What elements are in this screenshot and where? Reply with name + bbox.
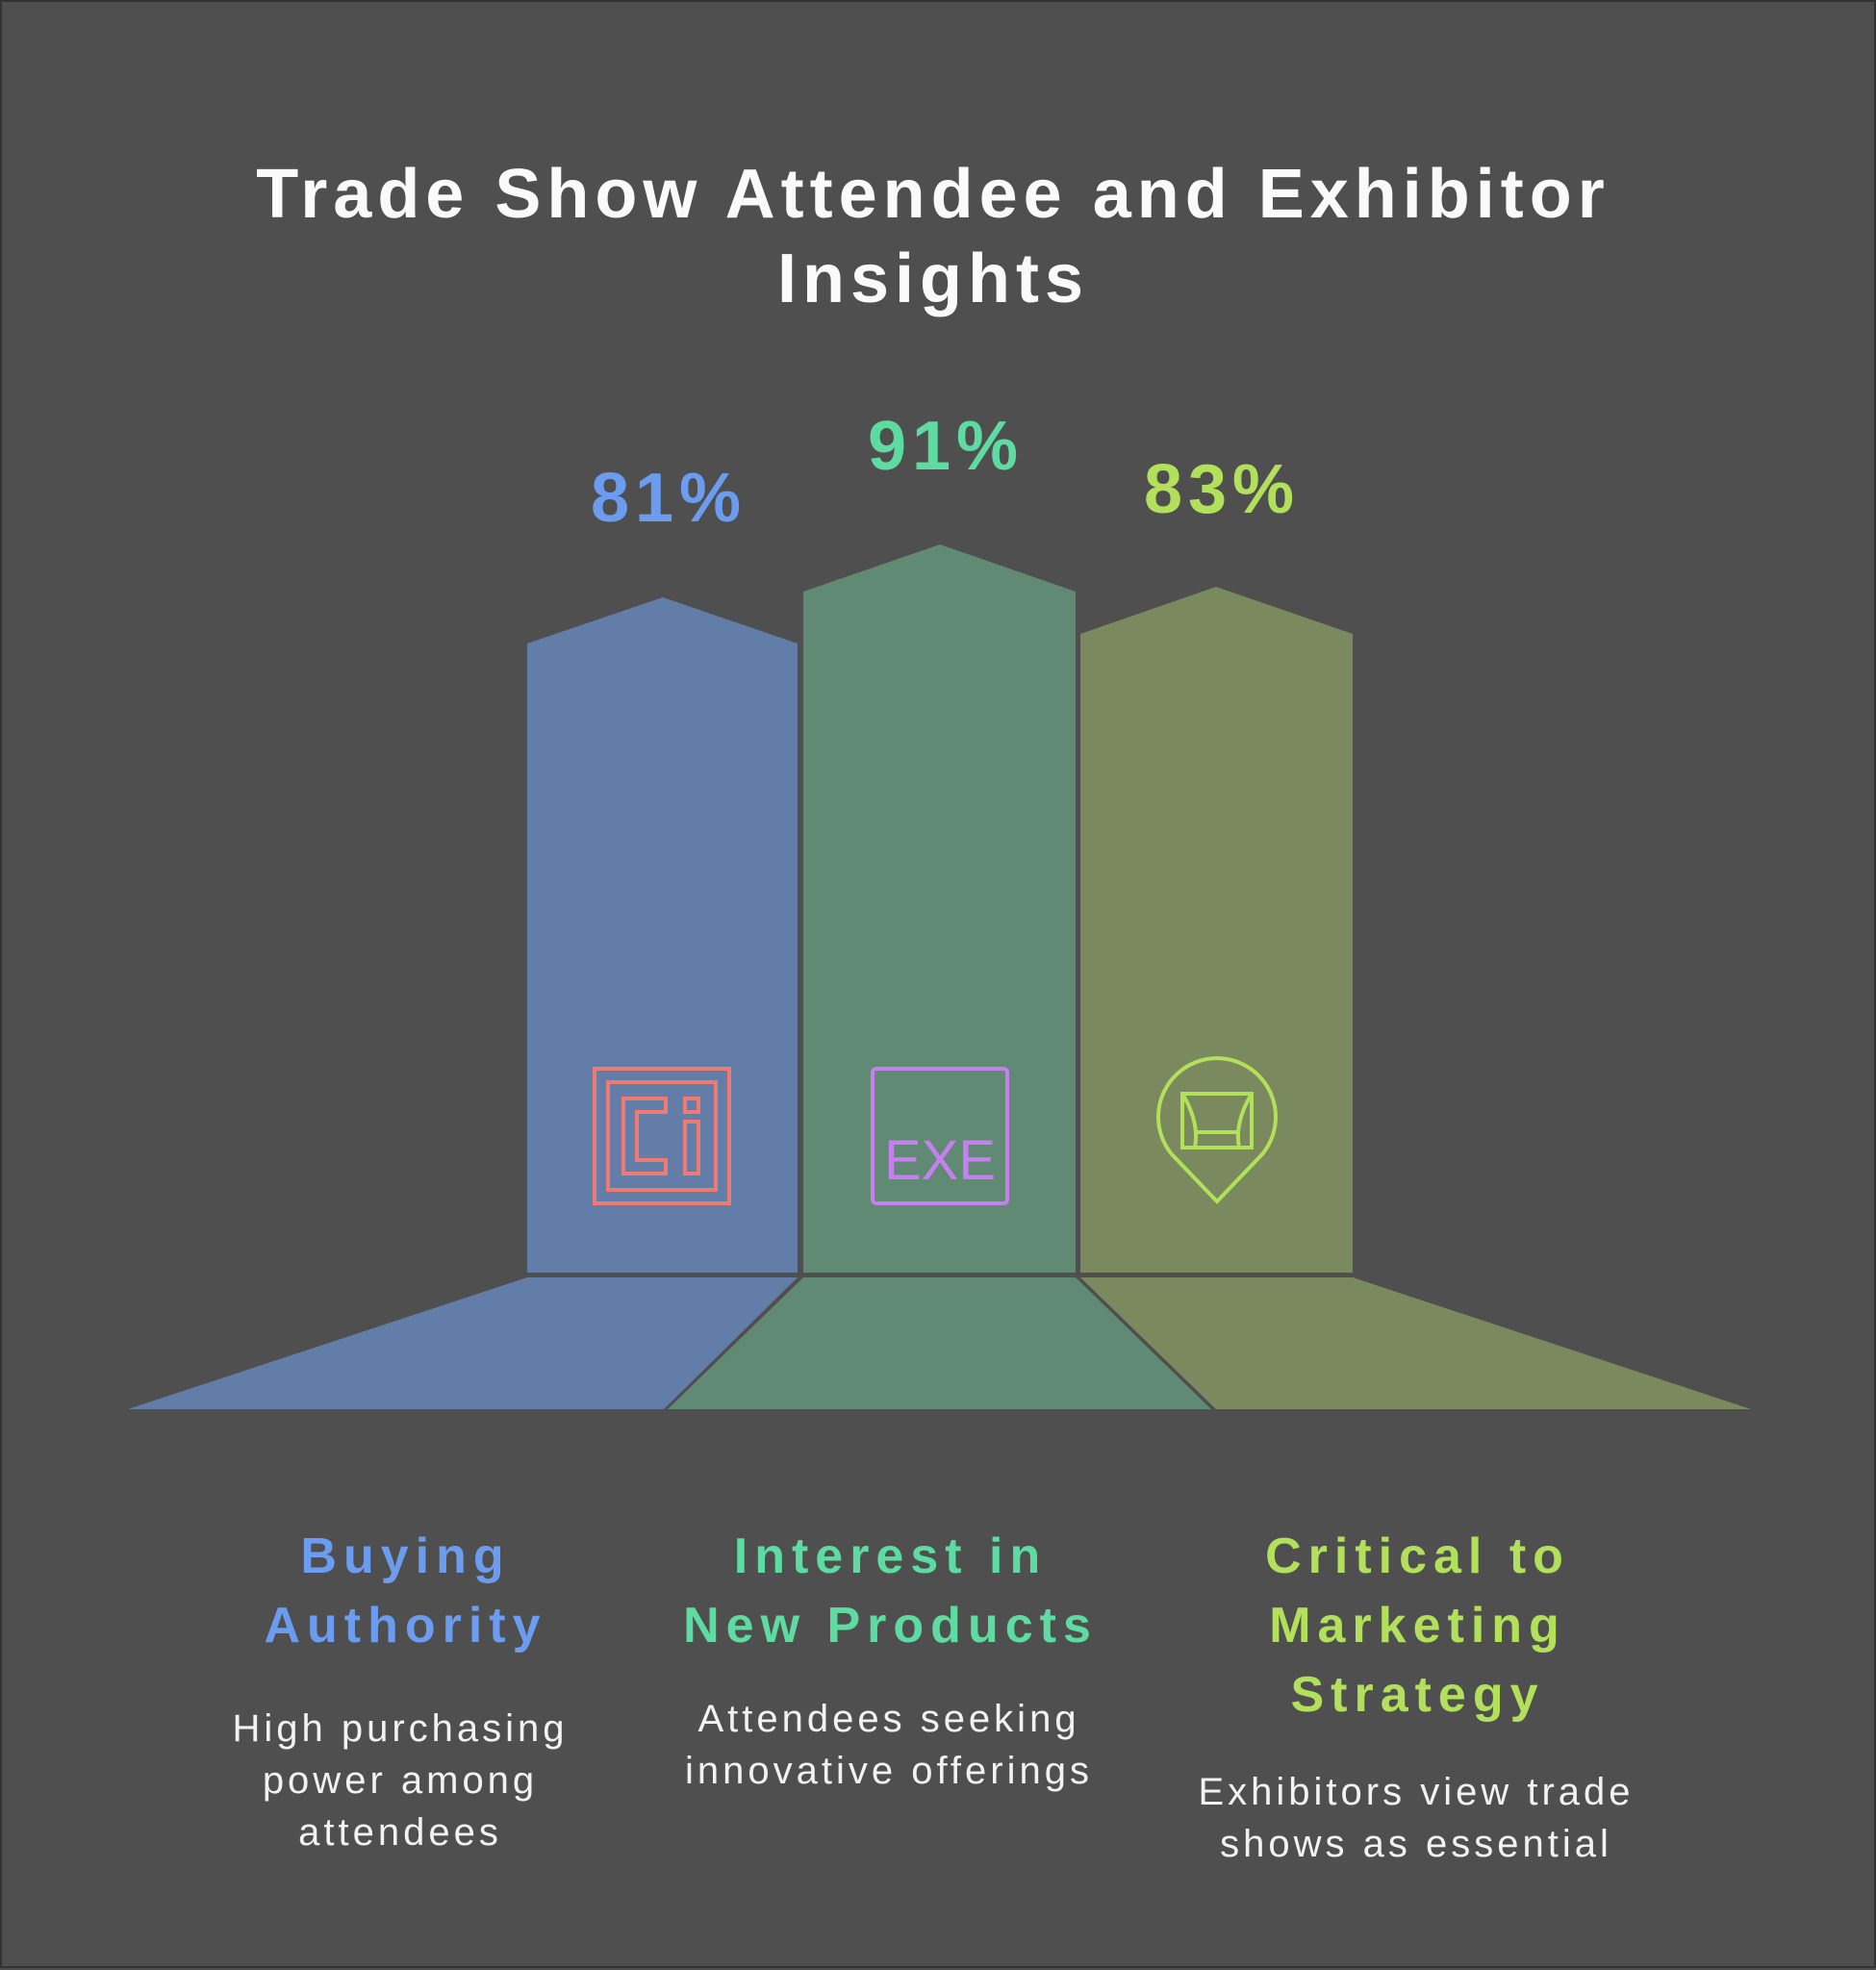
label: interest in new products [683,1528,1098,1792]
icon: Ci square [595,1069,729,1203]
icon: EXE: EXE [884,1129,996,1192]
label: critical to marketing strategy: shows as essential [1220,1823,1612,1865]
percentage 81%: 81% [591,460,747,537]
label: buying authority: Authority [264,1598,547,1654]
label: buying authority: attendees [298,1811,502,1854]
bar: buying authority [128,597,798,1409]
label: interest in new products: Interest in [734,1528,1047,1584]
percentage 91%: 91% [868,408,1024,485]
label: buying authority [232,1528,569,1854]
label: interest in new products: New Products [683,1598,1098,1654]
icon: EXE [873,1069,1007,1203]
bar: critical to marketing [1080,587,1751,1409]
label: critical to marketing strategy: Strategy [1290,1667,1545,1723]
label: buying authority: power among [263,1759,538,1802]
percentage 83%: 83% [1144,451,1300,528]
label: buying authority: Buying [300,1528,511,1584]
title: Insights [777,240,1089,317]
label: buying authority: High purchasing [232,1707,569,1750]
label: critical to marketing strategy: Critical to [1265,1528,1570,1584]
bar: interest in new products [668,544,1211,1409]
label: interest in new products: innovative offerings [685,1750,1093,1792]
label: critical to marketing strategy [1198,1528,1635,1865]
label: critical to marketing strategy: Exhibitors view trade [1198,1771,1635,1813]
label: interest in new products: Attendees seeking [697,1698,1080,1740]
label: critical to marketing strategy: Marketing [1269,1598,1566,1654]
title: Trade Show Attendee and Exhibitor [256,156,1610,233]
icon: map pin with stage [1158,1058,1276,1201]
title [256,156,1610,317]
